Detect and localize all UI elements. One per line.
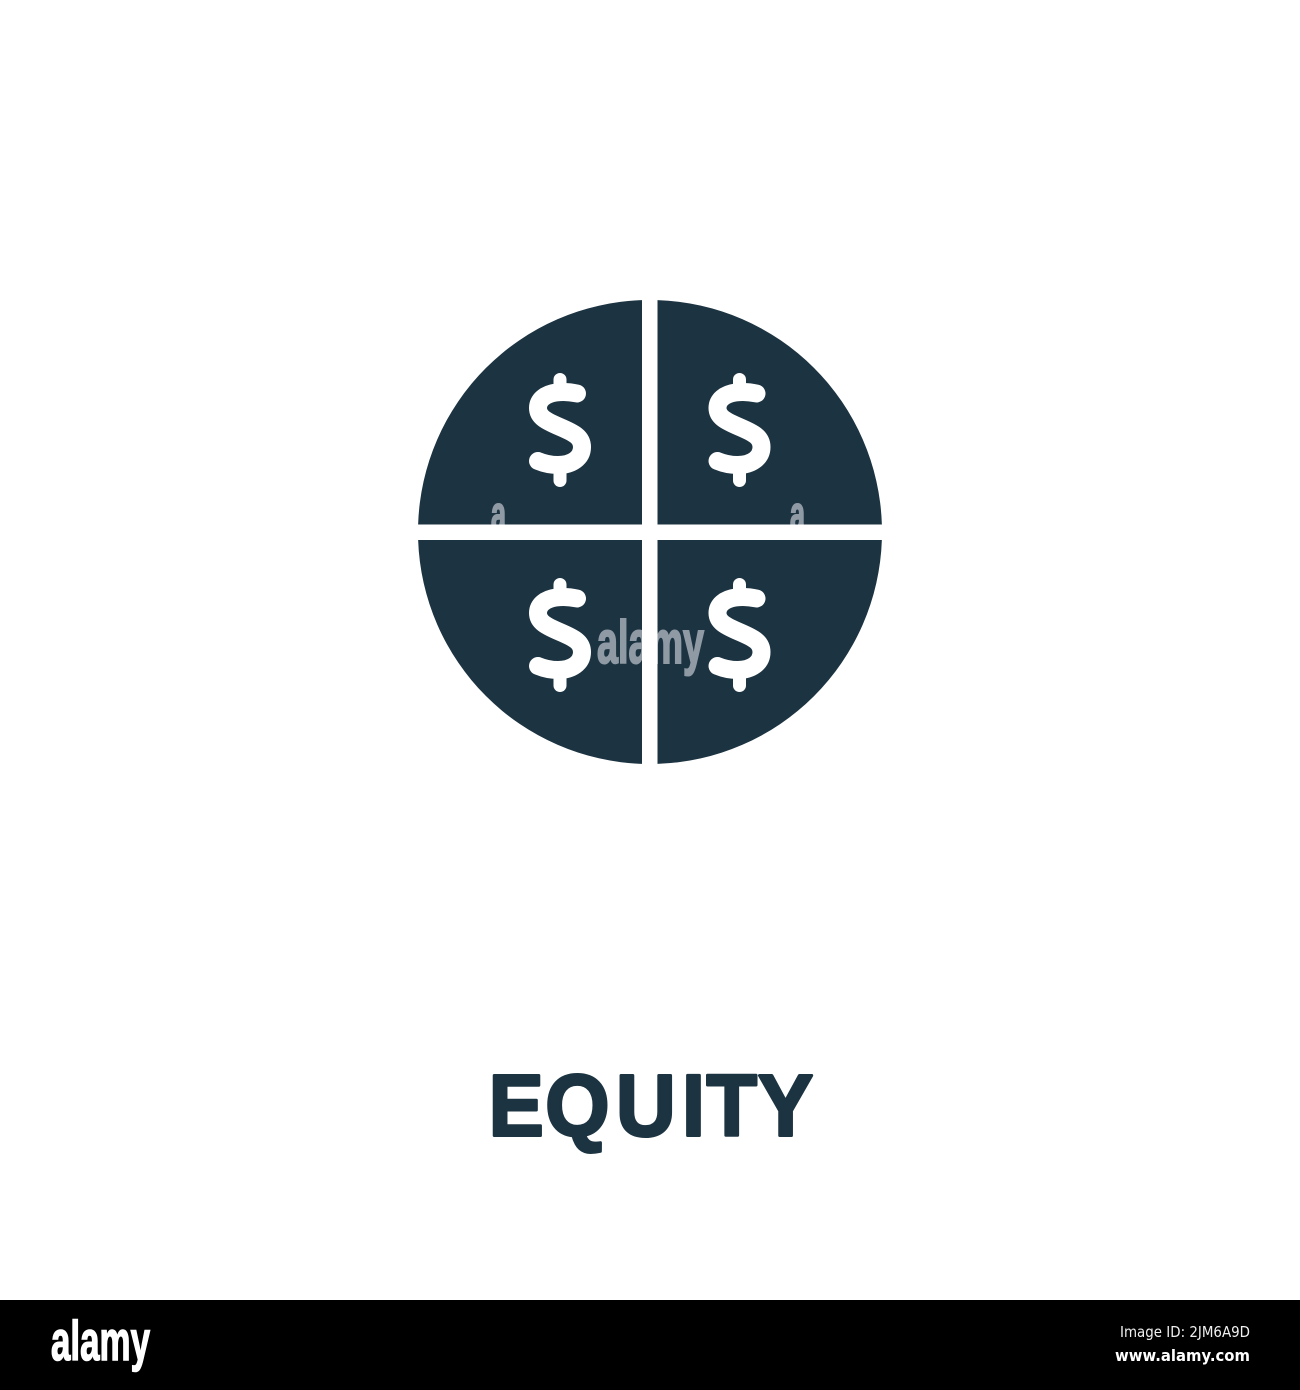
watermark on icon: a xyxy=(491,486,507,542)
infographic canvas xyxy=(0,300,1300,1390)
watermark on icon: a xyxy=(790,486,806,542)
icon: dollar sign top right xyxy=(718,380,762,480)
icon: equity pie circle with four dollar quadrants xyxy=(418,300,882,764)
title: EQUITY xyxy=(489,1057,813,1154)
footer logo: alamy xyxy=(51,1309,150,1372)
icon: dollar sign bottom right xyxy=(718,584,762,686)
image id: Image ID: 2JM6A9D xyxy=(1120,1323,1250,1341)
footer bar xyxy=(0,1300,1300,1390)
icon: dollar sign top left xyxy=(538,380,582,480)
watermark on icon xyxy=(491,486,806,676)
icon: dollar sign bottom left xyxy=(538,584,582,686)
circle quadrants xyxy=(418,300,882,764)
watermark on icon: alamy xyxy=(597,609,704,676)
website: www.alamy.com xyxy=(1115,1346,1250,1365)
